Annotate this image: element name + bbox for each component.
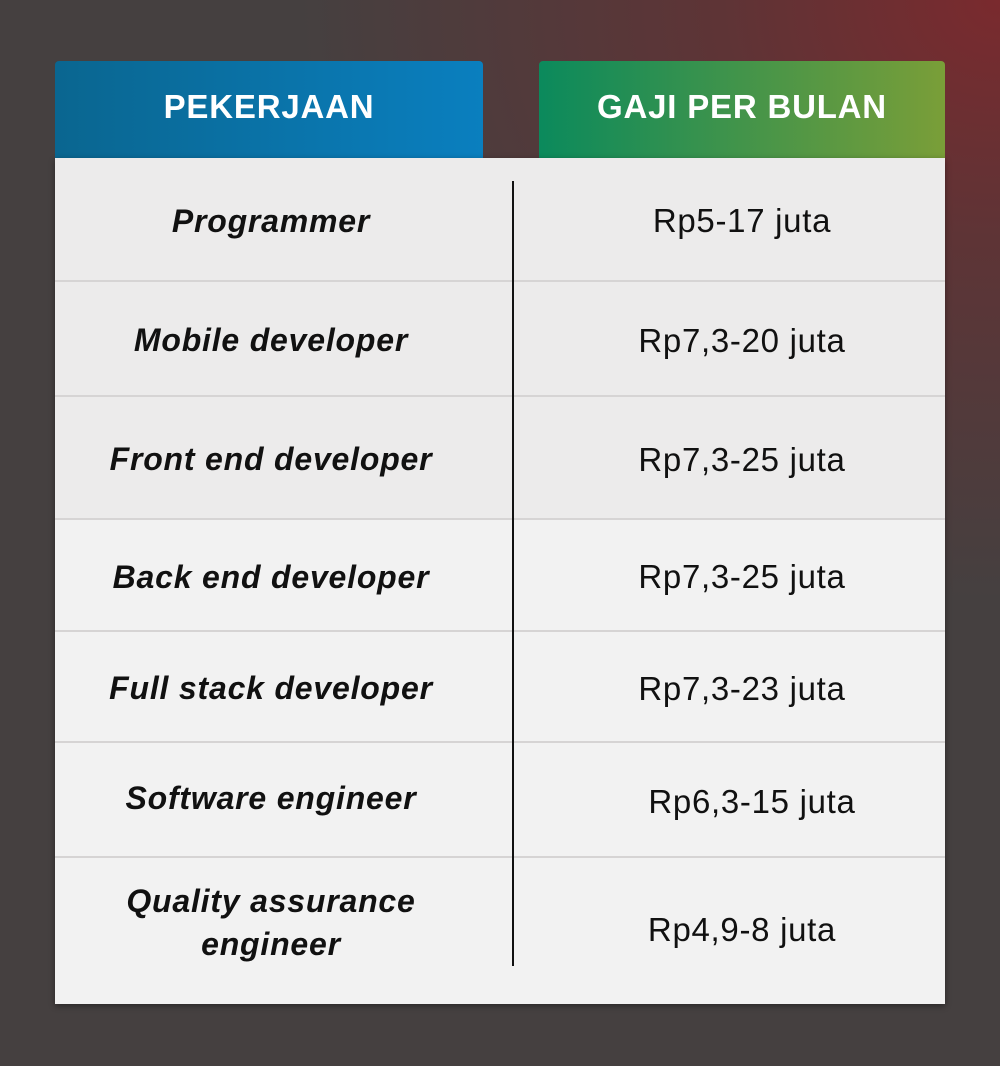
row: software engineer	[55, 743, 945, 858]
row: front end: Rp7,3-25 juta	[638, 440, 846, 478]
row: mobile developer: Mobile developer	[134, 322, 408, 358]
row: full stack	[55, 632, 945, 743]
header: pekerjaan: PEKERJAAN	[164, 88, 374, 125]
header: pekerjaan	[55, 61, 483, 158]
row: software engineer: Software engineer	[125, 780, 416, 816]
row: full stack: Rp7,3-23 juta	[638, 670, 846, 706]
row: full stack: Full stack developer	[109, 670, 433, 706]
row: back end: Rp7,3-25 juta	[638, 558, 846, 595]
row: back end	[55, 520, 945, 632]
row: programmer: Rp5-17 juta	[653, 202, 831, 239]
row: qa engineer	[126, 883, 836, 962]
row: front end	[55, 397, 945, 520]
row: programmer: Programmer	[172, 202, 370, 238]
row: qa engineer: Rp4,9-8 juta	[648, 911, 836, 948]
row: qa engineer: Quality assurance	[126, 883, 416, 919]
row: programmer	[55, 158, 945, 282]
row: front end: Front end developer	[110, 441, 432, 477]
column divider	[512, 181, 514, 966]
row: back end: Back end developer	[113, 558, 429, 594]
header: gaji per bulan: GAJI PER BULAN	[597, 88, 887, 125]
row: mobile developer	[55, 282, 945, 397]
header: gaji per bulan	[539, 61, 945, 158]
row: qa engineer: engineer	[201, 926, 341, 962]
row: mobile developer: Rp7,3-20 juta	[638, 322, 846, 358]
table	[55, 158, 945, 1004]
row: software engineer: Rp6,3-15 juta	[648, 782, 856, 820]
